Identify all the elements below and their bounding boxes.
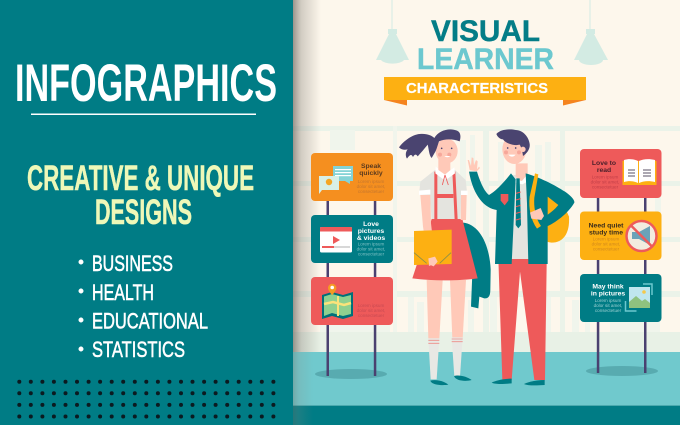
bullet list: EDUCATIONAL (92, 308, 208, 334)
sign: need quiet study time: dolor sit amet, (592, 242, 620, 246)
icon: map with pin (322, 284, 353, 319)
sign: speak quickly: consectetuer (358, 189, 385, 194)
sign: speak quickly: quickly (359, 170, 383, 177)
bullet list (79, 251, 208, 362)
bullet list: HEALTH (92, 280, 154, 305)
sign: love to read: Lorem ipsum (592, 174, 618, 180)
sign: may think in pictures: Lorem ipsum (595, 298, 621, 303)
bullet list: STATISTICS (92, 337, 185, 362)
sign: love pictures and videos (311, 215, 393, 263)
icon: open book (622, 159, 656, 185)
sign: map: dolor sit amet, (357, 308, 385, 313)
character: girl (399, 129, 491, 385)
sign: need quiet study time: Lorem ipsum (593, 236, 619, 242)
sign: love pictures and videos: pictures (358, 228, 384, 235)
title: visual learner: LEARNER (417, 43, 554, 76)
icon: picture (626, 284, 652, 311)
sign: love to read: read (597, 167, 611, 174)
sign: love pictures and videos: Lorem ipsum (358, 242, 384, 246)
sign: need quiet study time: consectetuer (593, 246, 620, 252)
sign: love to read: dolor sit amet, (591, 180, 619, 184)
sign: speak quickly: Lorem ipsum (358, 179, 384, 184)
sign: love to read (580, 149, 662, 198)
icon: chat bubbles (319, 166, 353, 194)
sign: may think in pictures: in pictures (591, 290, 625, 298)
sign: love pictures and videos: Love (363, 221, 379, 228)
icon: left ceiling lamp (376, 0, 409, 64)
left teal panel (0, 0, 293, 425)
characters (399, 129, 574, 385)
sign: need quiet study time: Need quiet (589, 222, 624, 230)
title: visual learner (417, 15, 554, 76)
sign: need quiet study time: study time (589, 230, 623, 236)
sign: love pictures and videos: consectetuer (358, 252, 385, 256)
banner: characteristics (384, 77, 586, 106)
banner: characteristics: CHARACTERISTICS (406, 81, 548, 97)
icon: right ceiling lamp (574, 0, 608, 65)
title: visual learner: VISUAL (431, 15, 540, 48)
icon: no sound (626, 221, 656, 251)
sign: may think in pictures (580, 274, 662, 322)
illustration background (293, 0, 680, 425)
heading underline (31, 114, 256, 115)
right sign stand (580, 149, 662, 376)
sign: love pictures and videos: & videos (357, 235, 385, 242)
sign: speak quickly (311, 153, 393, 201)
subheading: creative and unique designs: DESIGNS (95, 193, 192, 232)
subheading: creative and unique designs (27, 159, 254, 232)
character: boy (468, 129, 574, 385)
icon: video player (320, 227, 352, 252)
subheading: creative and unique designs: CREATIVE & UNIQUE (27, 159, 254, 198)
heading: infographics: INFOGRAPHICS (15, 54, 277, 113)
sign: may think in pictures: May think (592, 284, 624, 290)
sign: map: Lorem ipsum (358, 303, 384, 308)
sign: speak quickly: dolor sit amet, (357, 184, 385, 189)
sign: map (311, 277, 393, 325)
left sign stand (311, 153, 393, 379)
sign: love to read: Love to (592, 160, 616, 167)
dot grid (17, 380, 275, 418)
sign: need quiet study time (580, 212, 662, 260)
sign: speak quickly: Speak (361, 163, 381, 170)
sign: may think in pictures: dolor sit amet, (594, 303, 622, 308)
sign: may think in pictures: consectetuer (595, 308, 622, 313)
sign: love to read: consectetuer (592, 184, 619, 190)
bullet list: BUSINESS (92, 251, 173, 276)
sign: map: consectetuer (358, 313, 385, 318)
sign: love pictures and videos: dolor sit amet, (357, 246, 385, 252)
